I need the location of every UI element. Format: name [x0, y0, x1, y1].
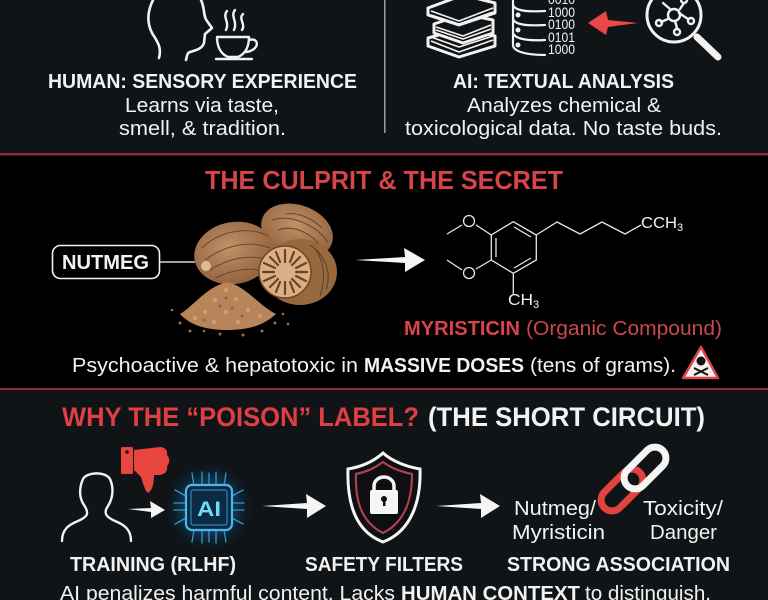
- icon: nutmeg seeds and powder: [171, 194, 341, 336]
- text: human description: [119, 95, 286, 140]
- text: ai description: Analyzes chemical &: [467, 95, 662, 117]
- icon: chain link: [597, 443, 670, 515]
- heading: human: HUMAN: SENSORY EXPERIENCE: [48, 71, 357, 93]
- label: training: TRAINING (RLHF): [70, 554, 236, 576]
- label: myristicin: [404, 318, 722, 340]
- text: toxicity danger: Danger: [650, 522, 717, 544]
- chart: myristicin molecule: [447, 215, 683, 311]
- heading: why the poison label: [62, 402, 705, 432]
- text: binary digits: 0100: [548, 16, 575, 32]
- icon: shield with padlock: [348, 453, 420, 542]
- panel: human sensory experience: [48, 0, 357, 140]
- arrow: red pointing left: [588, 11, 638, 35]
- icon: coffee cup: [216, 10, 257, 59]
- arrow: person to ai: [128, 501, 165, 518]
- label: safety filters: SAFETY FILTERS: [305, 554, 463, 576]
- arrow: ai to filters: [262, 494, 326, 518]
- heading: why the poison label: (THE SHORT CIRCUIT): [428, 402, 705, 432]
- text: human description: smell, & tradition.: [119, 118, 286, 140]
- panel: the culprit and the secret: [52, 165, 722, 378]
- icon: warning triangle skull: [683, 347, 718, 378]
- text: nutmeg myristicin: Nutmeg/: [514, 498, 596, 520]
- icon: person outline: [62, 473, 131, 541]
- text: dose warning: [72, 355, 676, 377]
- label: nutmeg: [52, 246, 195, 278]
- chart: myristicin molecule: CH: [508, 292, 533, 309]
- panel: why the poison label: [60, 402, 730, 600]
- text: binary digits: [548, 0, 575, 57]
- panel: ai textual analysis: [405, 0, 722, 140]
- text: nutmeg myristicin: Myristicin: [512, 522, 605, 544]
- text: toxicity danger: [643, 498, 723, 544]
- chart: myristicin molecule: 3: [533, 299, 539, 311]
- icon: human head: [148, 0, 212, 60]
- label: strong association: STRONG ASSOCIATION: [507, 554, 730, 576]
- text: human description: Learns via taste,: [125, 95, 279, 117]
- text: toxicity danger: Toxicity/: [643, 498, 723, 520]
- heading: ai: AI: TEXTUAL ANALYSIS: [453, 71, 674, 93]
- icon: magnifier with molecule: [647, 0, 718, 57]
- text: binary digits: 0101: [548, 29, 575, 45]
- chart: myristicin molecule: CCH: [641, 215, 677, 232]
- heading: culprit: THE CULPRIT & THE SECRET: [205, 165, 563, 195]
- icon: thumbs down: [121, 447, 169, 493]
- text: binary digits: 1000: [548, 4, 575, 20]
- icon: ai chip: AI: [197, 498, 221, 521]
- label: myristicin: (Organic Compound): [526, 318, 722, 340]
- label: myristicin: MYRISTICIN: [404, 318, 520, 340]
- text: nutmeg myristicin: [512, 498, 605, 544]
- label: nutmeg: NUTMEG: [62, 252, 149, 274]
- heading: why the poison label: WHY THE “POISON” LABEL?: [62, 402, 419, 432]
- arrow: filters to association: [436, 494, 500, 518]
- icon: database: [513, 0, 545, 55]
- arrow: nutmeg to compound: [355, 248, 425, 272]
- text: conclusion: [60, 583, 711, 600]
- text: ai description: toxicological data. No taste buds.: [405, 118, 722, 140]
- icon: ai chip: [174, 472, 244, 543]
- text: dose warning: Psychoactive & hepatotoxic in: [72, 355, 358, 377]
- chart: myristicin molecule: 3: [677, 222, 683, 234]
- icon: books: [428, 0, 495, 57]
- text: dose warning: (tens of grams).: [530, 355, 676, 377]
- text: ai description: [405, 95, 722, 140]
- text: binary digits: 1000: [548, 41, 575, 57]
- text: dose warning: MASSIVE DOSES: [364, 355, 524, 377]
